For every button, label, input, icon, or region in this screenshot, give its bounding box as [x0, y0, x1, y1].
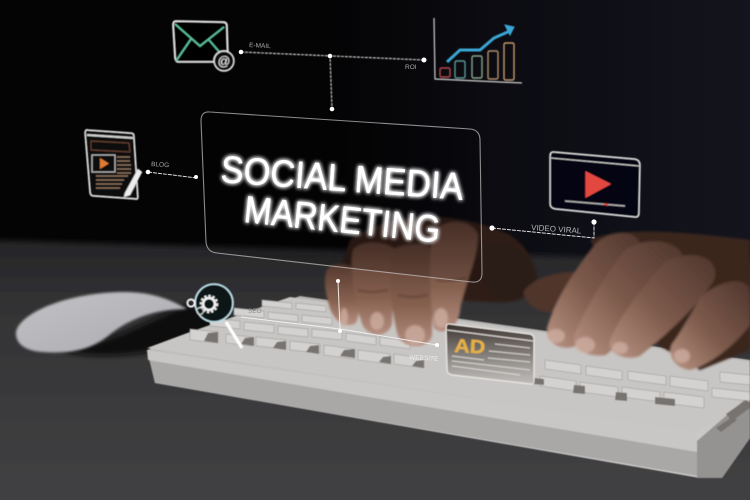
- icon: ROI bar chart: [434, 18, 522, 83]
- blog connector: [146, 170, 198, 179]
- computer mouse: [16, 292, 240, 356]
- finger b: [573, 241, 683, 356]
- panel: central glass panel: [201, 112, 482, 282]
- label: e-mail: E-MAIL: [249, 42, 271, 50]
- finger 4: [430, 222, 478, 331]
- label: SEO: SEO: [248, 308, 262, 315]
- keyboard keys: [190, 300, 750, 408]
- nails: [340, 308, 690, 363]
- heading: [219, 149, 465, 252]
- ad text: AD: [454, 336, 486, 359]
- label: ROI: ROI: [405, 64, 417, 71]
- icon: email envelope: [173, 21, 234, 71]
- icon: video player: [550, 152, 640, 217]
- key shadows: [204, 332, 750, 432]
- left hand: [325, 217, 537, 346]
- video viral connector: [489, 219, 597, 238]
- knuckle creases: [358, 278, 466, 297]
- label: blog: BLOG: [151, 161, 169, 169]
- icon: email envelope: @: [218, 54, 230, 68]
- connector lines: email, ROI and panel: [241, 52, 424, 109]
- finger c: [609, 255, 715, 358]
- keyboard: [147, 296, 750, 478]
- heading: SOCIAL MEDIA: [219, 149, 465, 209]
- finger 1: [325, 264, 359, 325]
- back of left thumb: [480, 243, 537, 298]
- icon: blog document: [85, 130, 142, 199]
- ad card: [446, 324, 534, 384]
- label: video viral: VIDEO VIRAL: [531, 223, 582, 236]
- finger a: [547, 232, 642, 348]
- right hand: [340, 232, 750, 370]
- finger 3: [390, 244, 434, 346]
- finger 2: [352, 242, 396, 335]
- heading: MARKETING: [242, 189, 442, 252]
- finger d: [670, 281, 750, 370]
- SEO connector: [241, 279, 439, 347]
- label: website: WEBSITE: [409, 354, 439, 363]
- icon: SEO magnifier: [187, 284, 242, 348]
